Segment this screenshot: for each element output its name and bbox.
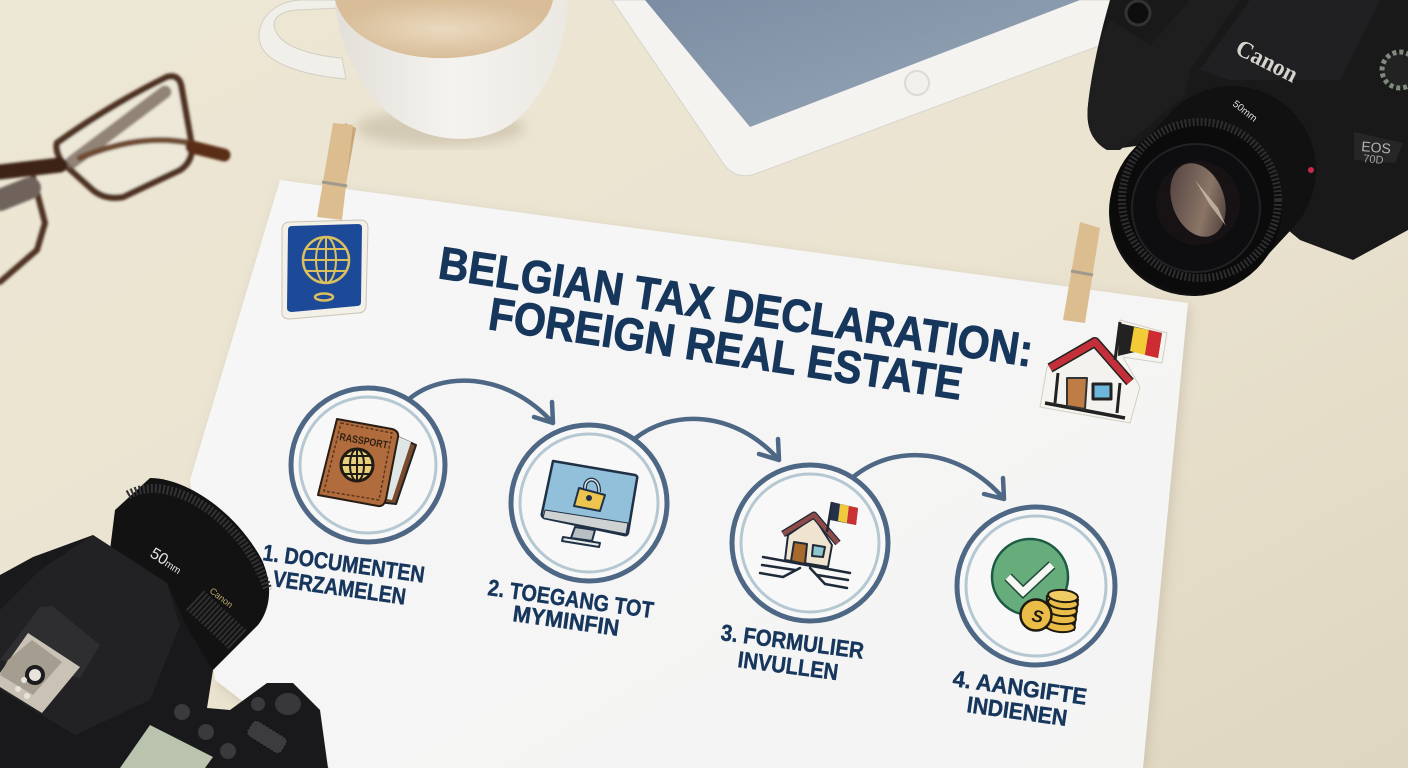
arrow 3 to 4	[852, 455, 1004, 499]
lens: 50mm	[147, 545, 185, 578]
icon: coins: S	[1030, 606, 1045, 627]
icon: coins	[1020, 588, 1079, 634]
title: BELGIAN TAX DECLARATION:	[436, 236, 1037, 377]
icon: monitor with lock	[542, 461, 637, 547]
icon: house and flag	[760, 502, 858, 588]
left camera	[0, 478, 328, 768]
model badge: 70D	[1363, 153, 1384, 167]
clothespin right	[1063, 222, 1100, 323]
flow arrows	[408, 381, 1004, 499]
icon: house with flag patch	[1040, 320, 1167, 423]
step 2	[486, 425, 667, 641]
brand label: Canon	[1231, 35, 1302, 88]
label 1: 1. DOCUMENTEN	[261, 539, 426, 588]
right camera: 50mm	[1230, 99, 1259, 124]
icon: passport: RASSPORT	[338, 431, 389, 452]
title: FOREIGN REAL ESTATE	[486, 287, 966, 410]
label 4	[951, 665, 1089, 731]
coffee cup	[259, 0, 568, 146]
lens: Canon	[208, 586, 235, 610]
label 4: INDIENEN	[965, 691, 1069, 731]
step 3 circle	[732, 465, 888, 621]
step 1	[261, 388, 445, 610]
lens barrel	[1193, 170, 1232, 212]
top lcd	[120, 725, 213, 768]
icon: green check	[992, 539, 1068, 615]
label 1: VERZAMELEN	[271, 565, 408, 610]
body	[0, 535, 328, 768]
label 3: INVULLEN	[736, 646, 840, 685]
arrow 2 to 3	[632, 419, 779, 460]
label 4: 4. AANGIFTE	[951, 665, 1089, 710]
step 2 circle	[511, 425, 667, 581]
hot shoe	[0, 633, 80, 713]
tablet	[612, 0, 1112, 176]
step 4	[951, 507, 1115, 731]
right camera	[1088, 0, 1408, 294]
label 1	[261, 539, 426, 610]
step 4 circle	[957, 507, 1115, 665]
dials and buttons	[174, 693, 301, 759]
model badge: EOS	[1361, 138, 1392, 157]
label 3	[719, 619, 866, 685]
label 3: 3. FORMULIER	[719, 619, 866, 664]
icon: passport patch	[282, 220, 368, 319]
paper sheet	[190, 180, 1191, 768]
label 2: 2. TOEGANG TOT	[486, 574, 655, 623]
label 2: MYMINFIN	[511, 600, 621, 641]
clothespin left	[317, 123, 356, 220]
arrow 1 to 2	[408, 381, 553, 423]
step 3	[719, 465, 888, 685]
icon: passport	[318, 419, 416, 506]
glasses	[0, 76, 224, 282]
step 1 circle	[291, 388, 445, 542]
model badge	[1354, 132, 1403, 167]
lens	[110, 478, 269, 670]
